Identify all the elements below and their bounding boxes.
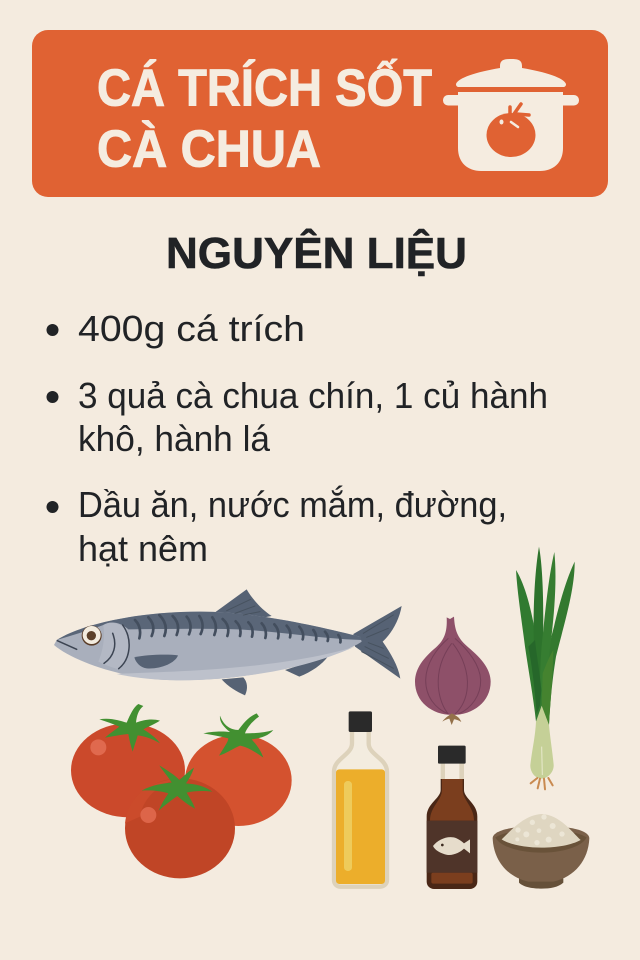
tomato right	[185, 713, 292, 826]
icon: fish sauce bottle	[427, 746, 477, 889]
list item: seasonings	[46, 484, 507, 569]
icon: seasoning bowl	[493, 814, 589, 889]
heading: ingredients: NGUYÊN LIỆU	[166, 228, 467, 278]
list item: tomato, onion, scallion: khô, hành lá	[78, 418, 271, 459]
tomato left	[71, 704, 185, 817]
banner background	[32, 30, 608, 197]
list item: tomato, onion, scallion	[46, 375, 548, 459]
scallion leaves	[516, 547, 575, 725]
panel: title banner	[32, 30, 608, 197]
title	[97, 58, 432, 178]
scallion bulb	[530, 706, 554, 779]
icon: pot with tomato	[443, 59, 579, 171]
tomato front	[125, 765, 235, 878]
icon: tomatoes	[71, 704, 292, 878]
list item: fish: 400g cá trích	[78, 308, 305, 349]
title: CÀ CHUA	[97, 120, 321, 178]
icon: shallot	[415, 617, 491, 725]
icon: herring fish	[54, 589, 402, 695]
icon: cooking oil bottle	[334, 711, 387, 887]
list item: seasonings: hạt nêm	[78, 528, 208, 569]
icon: scallion	[516, 547, 575, 789]
list item: tomato, onion, scallion: 3 quả cà chua chín, 1 củ hành	[78, 375, 548, 416]
list item: seasonings: Dầu ăn, nước mắm, đường,	[78, 484, 507, 525]
ingredient list	[46, 308, 548, 569]
title: CÁ TRÍCH SỐT	[97, 58, 432, 118]
